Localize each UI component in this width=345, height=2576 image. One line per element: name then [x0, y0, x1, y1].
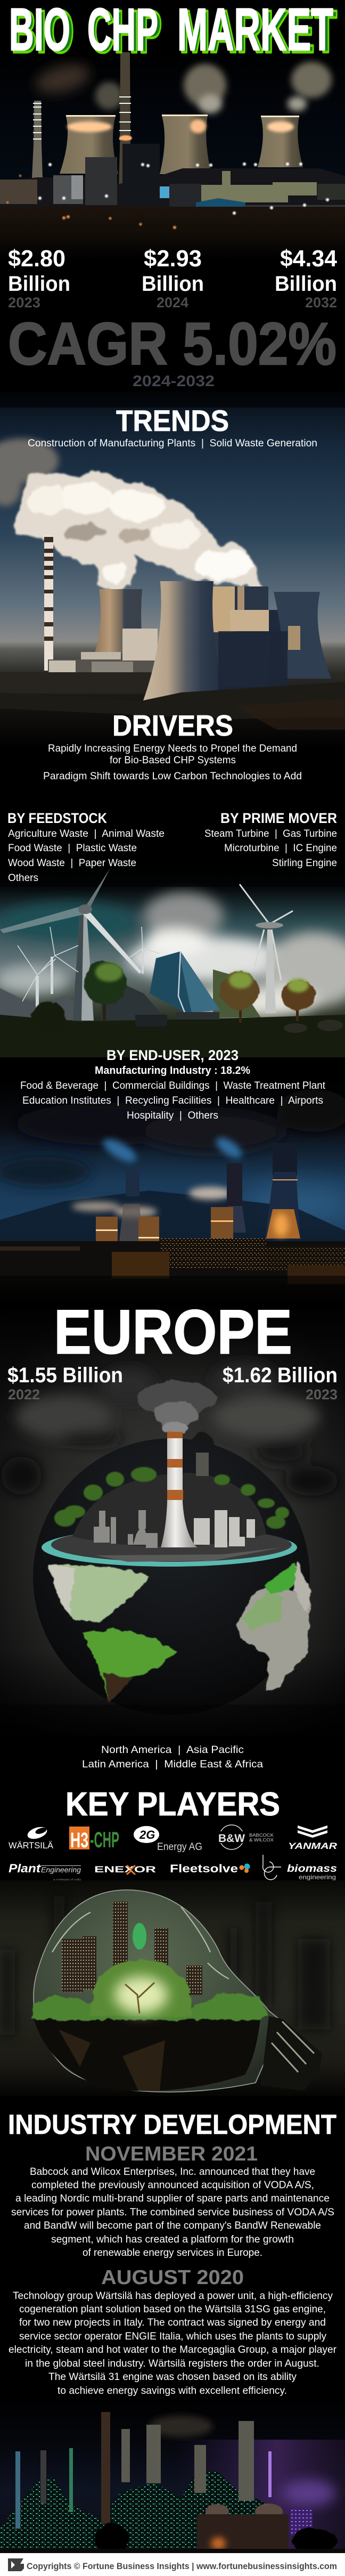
market size 2032 [275, 246, 338, 311]
europe value 2022: 2022 [8, 1387, 40, 1403]
logo: babcock and wilcox: BABCOCK [249, 1832, 274, 1838]
development: august 2020: electricity, steam and hot water to the Marcegaglia Group, a major player [9, 2344, 336, 2355]
purple unit [290, 2509, 313, 2536]
market size 2032: $4.34 [280, 246, 338, 272]
logo: enexor [94, 1864, 156, 1874]
scene: blue night industrial plant [0, 1081, 345, 1308]
small wind turbines [18, 927, 160, 1010]
fade to black [0, 1276, 345, 1308]
logo: babcock and wilcox: B&W [218, 1832, 245, 1845]
development: august 2020: for two new projects in Italy. The contract was signed by energy and [19, 2317, 326, 2328]
logo: h3-chp: -CHP [90, 1827, 119, 1852]
scene: polluted split globe [0, 1305, 345, 1742]
development: november 2021: NOVEMBER 2021 [85, 2143, 258, 2165]
main stack [101, 2412, 110, 2524]
chimney center [118, 52, 133, 205]
europe value 2023 [223, 1364, 338, 1403]
heading: europe: EUROPE [54, 1297, 292, 1367]
mountains [0, 988, 75, 1020]
end-user list: Hospitality | Others [127, 1110, 218, 1121]
title: CHP [89, 0, 162, 65]
white steam [72, 1187, 232, 1217]
development: november 2021: of renewable energy services in Europe. [83, 2247, 262, 2259]
heading: drivers: DRIVERS [112, 709, 233, 742]
white silos [194, 1510, 255, 1547]
CAGR period: 2024-2032 [133, 373, 215, 390]
orange drums [96, 1207, 233, 1244]
development: november 2021 [11, 2143, 334, 2259]
tree left [84, 960, 127, 1020]
logo: yanmar [288, 1825, 338, 1851]
second chimney [196, 1453, 209, 1476]
trees [95, 2523, 338, 2554]
feedstock list: Agriculture Waste | Animal Waste [8, 828, 165, 839]
prime mover list: Steam Turbine | Gas Turbine [204, 828, 337, 839]
site lights [38, 162, 329, 215]
solar array [135, 951, 220, 1026]
blue smoke highlights [100, 1134, 245, 1167]
heading: by prime mover: BY PRIME MOVER [220, 810, 337, 826]
land: south america [83, 1629, 177, 1703]
scene: daylight power plant with plume [0, 392, 345, 748]
footer [0, 2553, 345, 2576]
title: BIO [11, 0, 74, 65]
cooling tower C [258, 117, 303, 167]
drivers text [43, 743, 302, 782]
end-user list [20, 1080, 326, 1121]
cooling tower A [60, 116, 118, 174]
storage tank [197, 2514, 289, 2553]
title [9, 0, 337, 65]
logo: wartsila [9, 1825, 54, 1851]
bulb glass [34, 1890, 282, 2092]
lit process units [0, 2472, 282, 2551]
white wall reflections [52, 1907, 229, 1979]
europe value 2023: 2023 [306, 1387, 338, 1403]
development: august 2020: AUGUST 2020 [101, 2267, 244, 2289]
striped chimney [44, 535, 53, 671]
block building [212, 586, 268, 687]
leading segment: Manufacturing Industry : 18.2% [95, 1065, 250, 1077]
scene: light bulb with city and tree [0, 1880, 345, 2096]
purple flare stack [268, 2451, 272, 2497]
feedstock list [8, 828, 165, 884]
other regions list: North America | Asia Pacific [101, 1744, 244, 1756]
scene: power plant at night [0, 51, 345, 260]
logo: babcock and wilcox [217, 1825, 274, 1849]
development: august 2020: service sector operator ENGIE Italia, which uses the plants to supply [19, 2330, 326, 2342]
logo: enexor: ENEXOR [94, 1864, 156, 1874]
white plume [15, 472, 262, 587]
debris edge [96, 1547, 282, 1562]
blurred background columns [0, 1896, 330, 2035]
trends list: Construction of Manufacturing Plants | Solid Waste Generation [28, 437, 317, 449]
logo: 2g energy: 2G [139, 1828, 155, 1841]
left stacks [15, 2448, 73, 2529]
plant buildings [0, 168, 345, 216]
europe value 2022: $1.55 Billion [7, 1364, 123, 1387]
logo: 2g energy [134, 1826, 202, 1853]
feedstock list: Food Waste | Plastic Waste [8, 842, 137, 854]
top vignette [0, 866, 345, 887]
development: august 2020: The Wärtsilä 31 engine was chosen based on its ability [48, 2371, 297, 2383]
market size 2023 [8, 246, 70, 311]
development: august 2020: cogeneration plant solution based on the Wärtsilä 31SG gas engine, [19, 2303, 326, 2315]
foreground field [0, 682, 345, 719]
market size 2023: 2023 [8, 295, 40, 311]
main chimney [161, 1432, 197, 1547]
dark smoke [0, 1089, 345, 1187]
cut rim [42, 1528, 297, 1567]
development: november 2021: Babcock and Wilcox Enterprises, Inc. announced that they have [30, 2166, 315, 2178]
prime mover list: Stirling Engine [272, 857, 337, 869]
development: august 2020: in the global steel industry. Wärtsilä registers the order in August. [25, 2358, 319, 2369]
prime mover list: Microturbine | IC Engine [224, 842, 337, 854]
heading: by end-user: BY END-USER, 2023 [106, 1047, 239, 1063]
logo: plant engineering: Engineering [41, 1865, 81, 1874]
main cooling tower [143, 581, 227, 700]
development: november 2021: and BandW will become part of the company's BandW Renewable [24, 2220, 321, 2231]
small factories [94, 1510, 158, 1548]
logo: biomass engineering: engineering [299, 1873, 336, 1881]
rocks [284, 1020, 343, 1033]
logo: 2g energy: Energy AG [157, 1841, 202, 1853]
globe [33, 1432, 310, 1715]
logo: babcock and wilcox: & WILCOX [249, 1837, 274, 1843]
europe value 2023: $1.62 Billion [223, 1364, 338, 1387]
cooling tower left [95, 589, 144, 653]
mid tower [224, 1163, 246, 1233]
cloud bank [0, 892, 345, 1017]
logo: biomass engineering: biomass [287, 1863, 337, 1874]
logo: plant engineering: Plant [9, 1862, 42, 1875]
end-user list: Food & Beverage | Commercial Buildings | Waste Treatment Plant [20, 1080, 326, 1091]
tower top rims [66, 115, 299, 117]
small tower [126, 1170, 139, 1196]
drivers text: Paradigm Shift towards Low Carbon Technologies to Add [43, 770, 302, 782]
large wind turbine [0, 868, 142, 1021]
development: august 2020 [9, 2267, 336, 2396]
logo: yanmar: YANMAR [288, 1841, 338, 1851]
market size 2024: Billion [142, 272, 204, 296]
logo: biomass engineering [263, 1855, 337, 1881]
city skyline [62, 1902, 202, 1995]
land: north america [49, 1563, 149, 1622]
logo: wartsila: WÄRTSILÄ [9, 1840, 54, 1851]
chimney left [32, 101, 43, 178]
drivers text: Rapidly Increasing Energy Needs to Propel the Demand [48, 743, 297, 754]
moss layer [33, 1992, 269, 2020]
other regions list: Latin America | Middle East & Africa [82, 1758, 263, 1770]
glowing tree dome [91, 1960, 193, 2016]
smoke [149, 2416, 213, 2437]
development: november 2021: services for power plants. The combined service business of VODA A/S [11, 2206, 334, 2218]
development: november 2021: segment, which has created a platform for the growth [51, 2233, 294, 2245]
plant buildings [0, 1241, 345, 1278]
logo: fleetsolve [170, 1863, 250, 1875]
logo: plant engineering: a company of sofia [53, 1879, 81, 1882]
ground [0, 207, 345, 260]
tree right [281, 979, 316, 1021]
tall columns [121, 2421, 254, 2501]
icon: fortune business insights logo [8, 2558, 24, 2571]
market size 2032: Billion [275, 272, 337, 296]
development: august 2020: Technology group Wärtsilä has deployed a power unit, a high-efficiency [13, 2290, 333, 2302]
grey smoke top left [0, 438, 59, 506]
lamp base [261, 2016, 322, 2091]
logo: h3-chp: H3 [70, 1829, 88, 1852]
industrial surface [51, 1528, 292, 1562]
development: august 2020: to achieve energy savings with excellent efficiency. [58, 2385, 287, 2396]
logo: plant engineering [9, 1862, 81, 1882]
market size 2032: 2032 [305, 295, 337, 311]
logo: h3-chp [69, 1827, 119, 1852]
market size 2023: $2.80 [8, 246, 65, 272]
end-user list: Education Institutes | Recycling Facilities | Healthcare | Airports [22, 1095, 323, 1106]
land: europe [264, 1561, 310, 1614]
cooling tower B [160, 116, 211, 174]
bottom vignette [0, 1705, 345, 1742]
smoke clouds [1, 1364, 338, 1496]
heading: by feedstock: BY FEEDSTOCK [7, 810, 107, 826]
tall tower [265, 1143, 300, 1239]
tree center right [221, 972, 258, 1023]
cooling tower right [274, 592, 331, 679]
dome [72, 1473, 266, 1547]
market size 2024: 2024 [157, 295, 188, 311]
development: november 2021: a leading Nordic multi-brand supplier of spare parts and maintenance [15, 2192, 330, 2204]
heading: key players: KEY PLAYERS [65, 1786, 280, 1823]
mountains [0, 1191, 345, 1246]
ground [0, 1015, 345, 1057]
europe value 2022 [7, 1364, 123, 1403]
market size 2024: $2.93 [144, 246, 202, 272]
other regions list [82, 1744, 263, 1770]
right wind turbine [240, 884, 293, 1013]
heading: trends: TRENDS [116, 404, 229, 437]
cream blocks [201, 171, 317, 202]
low buildings [48, 659, 154, 680]
market size 2023: Billion [8, 272, 70, 296]
domes [206, 2504, 283, 2520]
chimney lights [33, 96, 131, 140]
trees [54, 1467, 289, 1529]
land: africa [237, 1585, 310, 1691]
main smoke column [137, 1381, 217, 1459]
scene: refinery at night [0, 2397, 345, 2554]
dark bush [32, 1001, 66, 1033]
drivers text: for Bio-Based CHP Systems [110, 754, 236, 766]
development: november 2021: completed the previously announced acquisition of VODA A/S, [31, 2179, 314, 2191]
logo: fleetsolve: Fleetsolve [170, 1863, 238, 1875]
scene: wind and solar landscape [0, 866, 345, 1057]
soil [33, 2016, 261, 2091]
feedstock list: Wood Waste | Paper Waste [8, 857, 136, 869]
prime mover list [204, 828, 337, 869]
feedstock list: Others [8, 872, 38, 884]
market size 2024 [142, 246, 204, 311]
